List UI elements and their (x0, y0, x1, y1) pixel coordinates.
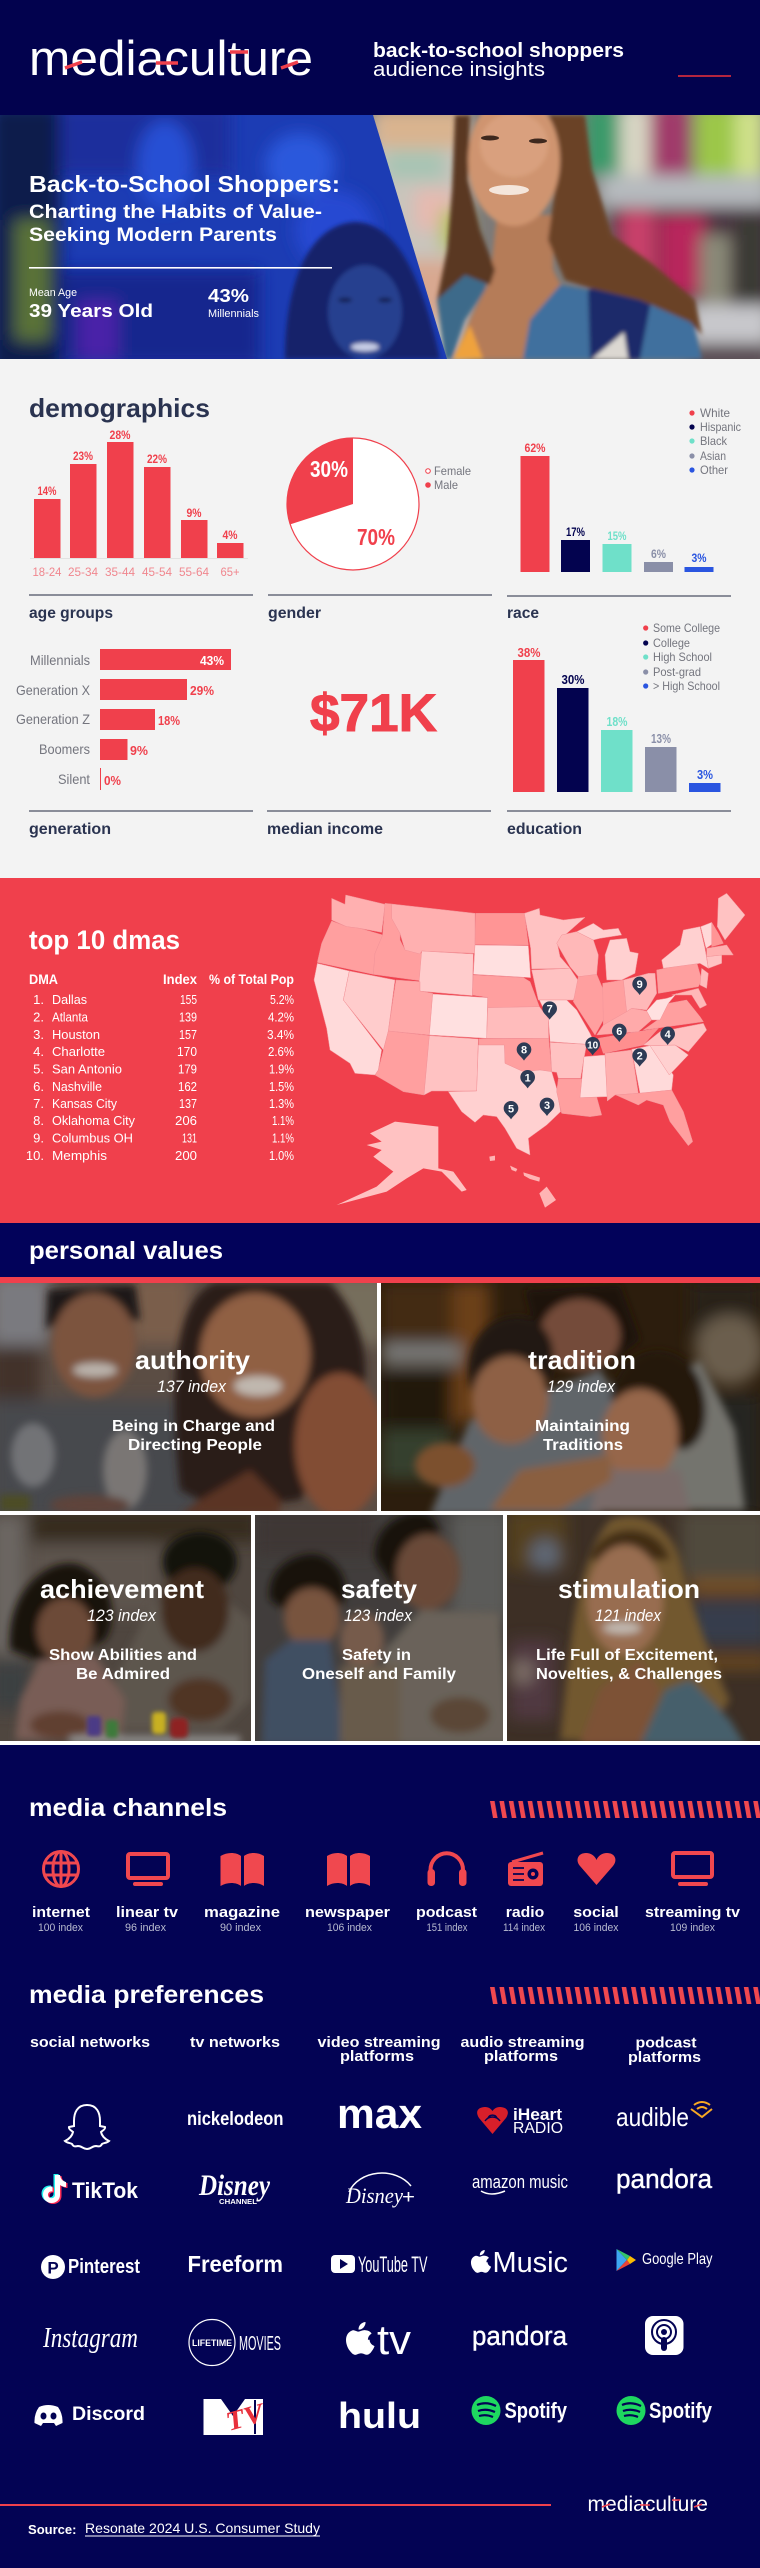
table: dma list: 9. (33, 1130, 44, 1146)
table: dma list: 206 (175, 1113, 197, 1128)
card: authority: Directing People (128, 1437, 262, 1454)
logo: instagram: Instagram (42, 2323, 138, 2354)
logo: disney plus: Disney (345, 2183, 403, 2208)
logo: tiktok (42, 2174, 139, 2204)
table: dma list: Kansas City (52, 1096, 117, 1111)
table: dma list: % of Total Pop (209, 971, 294, 987)
icon: open book (220, 1853, 264, 1886)
icon: tv (673, 1853, 712, 1886)
channel: streaming tv: streaming tv (645, 1904, 741, 1921)
logo: apple music: Music (492, 2247, 568, 2279)
logo: youtube tv (331, 2252, 428, 2277)
legend: race: White (700, 406, 730, 420)
channel: radio (503, 1853, 545, 1934)
chart: race: 6% (651, 547, 666, 561)
chart: age groups: 35-44 (105, 565, 135, 579)
logo: mtv (204, 2397, 269, 2437)
logo: discord: Discord (72, 2404, 145, 2425)
icon: tv (128, 1854, 168, 1886)
channel: linear tv: 96 index (125, 1922, 166, 1934)
channel: magazine: magazine (204, 1904, 280, 1921)
logo: apple tv: tv (377, 2316, 411, 2363)
hair (437, 115, 495, 300)
pin 1 Dallas (520, 1070, 535, 1088)
chart: generation: 0% (104, 773, 121, 788)
column headings: podcast (636, 2034, 696, 2052)
table: dma list (26, 971, 294, 1163)
channel: radio: radio (506, 1904, 544, 1921)
chart: age groups: 23% (73, 449, 93, 463)
logo: disney plus: + (402, 2187, 415, 2208)
card: safety: safety (341, 1574, 418, 1604)
logo: mediaculture: mediaculture (29, 32, 313, 86)
label: generation: generation (29, 821, 111, 838)
channel: podcast: 151 index (426, 1922, 468, 1934)
logo: lifetime movies: LIFETIME (192, 2338, 232, 2348)
heading: demographics: demographics (29, 393, 210, 423)
icon: heart (578, 1853, 615, 1885)
card: safety: Safety in (342, 1647, 411, 1664)
hero stat: mean age (29, 287, 153, 321)
pin 3 Houston (540, 1098, 554, 1116)
table: dma list: 131 (182, 1130, 197, 1146)
card: achievement: Be Admired (76, 1666, 170, 1683)
column headings: audio streaming (460, 2034, 584, 2051)
card: safety: 123 index (344, 1606, 412, 1625)
table: dma list: 3. (33, 1027, 44, 1042)
logo: hulu: hulu (338, 2395, 421, 2436)
channel: linear tv (116, 1854, 179, 1934)
map: united states (314, 893, 745, 1208)
table: dma list: 1.9% (269, 1062, 294, 1076)
logo: disney channel: CHANNEL (219, 2199, 258, 2206)
card: stimulation: Novelties, & Challenges (536, 1666, 722, 1683)
channel: magazine: 90 index (220, 1922, 261, 1934)
table: dma list: Columbus OH (52, 1130, 133, 1146)
face details (481, 136, 547, 195)
chart: education: 30% (562, 672, 585, 687)
column headings: platforms (340, 2048, 414, 2065)
logo: lifetime movies: MOVIES (239, 2333, 281, 2355)
hero photo: woman in store (373, 115, 760, 359)
chart: age groups (30, 428, 248, 579)
hero title: Back-to-School Shoppers: (29, 171, 340, 197)
channel: newspaper: newspaper (305, 1904, 390, 1921)
chart: gender pie (287, 438, 471, 570)
chart: age groups: 25-34 (68, 565, 98, 579)
heading: personal values: personal values (29, 1237, 223, 1265)
card: stimulation (507, 1510, 760, 1745)
card: stimulation: Life Full of Excitement, (536, 1647, 718, 1664)
table: dma list: Index (163, 971, 197, 987)
table: dma list: 157 (179, 1027, 197, 1042)
hero title (29, 171, 340, 246)
logo: disney channel: Disney (198, 2169, 271, 2202)
face (468, 94, 560, 226)
header title (373, 40, 624, 81)
chart: gender pie: 30% (310, 456, 348, 482)
hero stat: millennials: 43% (208, 286, 249, 306)
logo: iheart radio: iHeart (513, 2105, 562, 2124)
header band (0, 0, 760, 115)
chart: generation (16, 649, 231, 790)
panel: media channels (29, 1794, 760, 1934)
chart: race: 3% (692, 551, 707, 565)
legend: race (689, 406, 741, 477)
table: dma list: 3.4% (267, 1027, 294, 1042)
heading: media preferences: media preferences (29, 1981, 264, 2009)
card: tradition: Traditions (543, 1437, 623, 1454)
pin 6 Nashville (612, 1024, 627, 1042)
logo: spotify (472, 2396, 568, 2425)
table: dma list: Dallas (52, 992, 87, 1007)
table: dma list: Charlotte (52, 1044, 105, 1059)
pin 9 Columbus (632, 977, 647, 995)
card: authority (0, 1283, 377, 1511)
header title: back-to-school shoppers (373, 40, 624, 62)
logo: amazon music: amazon music (472, 2172, 568, 2192)
chart: race: 15% (608, 529, 627, 543)
panel: top 10 dmas (0, 878, 760, 1223)
chart: age groups: 45-54 (142, 565, 172, 579)
pin 8 Oklahoma City (517, 1042, 531, 1061)
legend: education: High School (653, 650, 712, 664)
legend: gender: Female (434, 464, 471, 478)
chart: age groups: 14% (38, 484, 57, 498)
pin 4 Charlotte (660, 1027, 675, 1045)
legend: race: Asian (700, 449, 726, 463)
label: median income: median income (267, 821, 383, 838)
logo: youtube tv: YouTube TV (358, 2252, 428, 2277)
icon: headphones (428, 1853, 466, 1886)
column headings: tv networks (190, 2034, 280, 2051)
column headings: video streaming (318, 2034, 440, 2051)
hero title: Charting the Habits of Value- (29, 202, 322, 223)
logo: tiktok: TikTok (72, 2178, 139, 2203)
pin 5 San Antonio (504, 1101, 518, 1119)
chart: age groups: 4% (222, 528, 238, 542)
table: dma list: 1.5% (269, 1079, 294, 1094)
card: tradition: 129 index (547, 1377, 615, 1396)
pin 8 Oklahoma City: 8 (521, 1045, 527, 1057)
logo: google play: Google Play (642, 2251, 712, 2268)
table: dma list: 137 (179, 1096, 197, 1111)
channel: podcast (416, 1853, 477, 1934)
pin 4 Charlotte: 4 (665, 1029, 672, 1041)
chart: generation: Boomers (39, 741, 90, 757)
footer (0, 2493, 708, 2537)
hero title: Seeking Modern Parents (29, 225, 277, 246)
chart: education: 13% (651, 731, 671, 746)
logo: apple tv (346, 2316, 411, 2363)
table: dma list: 170 (177, 1044, 197, 1059)
logo: pandora: pandora (616, 2164, 713, 2194)
card: authority: Being in Charge and (112, 1418, 275, 1435)
channel: social: 106 index (574, 1922, 619, 1934)
channel: podcast: podcast (416, 1904, 477, 1921)
jacket (437, 262, 490, 359)
table: dma list: Houston (52, 1027, 100, 1042)
chart: race: 62% (524, 441, 546, 455)
table: dma list: 1.3% (269, 1096, 294, 1111)
chart: generation: Millennials (30, 652, 90, 668)
logo: iheart radio: RADIO (513, 2120, 563, 2137)
pin 9 Columbus: 9 (637, 979, 643, 991)
chart: age groups: 9% (186, 506, 202, 520)
pin 10 Memphis: 10 (587, 1040, 599, 1051)
legend: gender (425, 464, 471, 492)
logo: spotify: Spotify (649, 2398, 713, 2423)
logo: google play (616, 2249, 712, 2271)
logo: spotify (616, 2396, 713, 2425)
channel: internet: internet (32, 1904, 90, 1921)
table: dma list: 5. (33, 1062, 44, 1076)
chart: age groups: 18-24 (32, 565, 62, 579)
legend: gender: Male (434, 478, 458, 492)
label: age groups: age groups (29, 605, 113, 622)
hero photo: blue tinted girl (0, 115, 447, 359)
card: stimulation: stimulation (558, 1574, 700, 1604)
chart: race: 17% (566, 525, 585, 539)
channel: social (573, 1853, 619, 1934)
hero stat: mean age: Mean Age (29, 287, 77, 299)
table: dma list: 1. (33, 992, 44, 1007)
table: dma list: Oklahoma City (52, 1113, 135, 1128)
logo: iheart radio (477, 2105, 563, 2137)
logo: discord (34, 2404, 145, 2426)
channel: magazine (204, 1853, 280, 1934)
icon: open book (327, 1853, 370, 1886)
label: gender: gender (268, 605, 321, 622)
icon: radio (508, 1853, 543, 1886)
legend: education: College (653, 636, 690, 650)
table: dma list: 1.1% (272, 1130, 294, 1146)
pin 2 Atlanta (632, 1048, 647, 1067)
card: safety (255, 1510, 510, 1745)
chart: education (513, 645, 720, 792)
logo: pinterest (41, 2255, 140, 2279)
card: authority: authority (135, 1345, 251, 1375)
chart: generation: 43% (200, 653, 224, 668)
table: dma list: Atlanta (52, 1010, 89, 1024)
channel: internet: 100 index (38, 1922, 83, 1934)
neck and chest (453, 215, 563, 359)
channel: newspaper (305, 1853, 390, 1934)
pin 5 San Antonio: 5 (508, 1103, 514, 1115)
pin 7 Kansas City (542, 1001, 557, 1020)
chart: age groups: 28% (110, 428, 131, 442)
header title: audience insights (373, 59, 545, 81)
card: tradition: tradition (528, 1345, 636, 1375)
chart: education: 38% (518, 645, 541, 660)
channel: streaming tv: 109 index (670, 1922, 715, 1934)
chart: age groups: 55-64 (179, 565, 209, 579)
legend: education (643, 621, 720, 693)
card: authority: 137 index (157, 1377, 226, 1396)
table: dma list: 1.1% (272, 1113, 294, 1128)
chart: age groups: 22% (147, 452, 167, 466)
label: education: education (507, 821, 582, 838)
chart: race (520, 441, 714, 572)
logo: freeform: Freeform (188, 2251, 283, 2277)
chart: generation: Generation X (16, 682, 91, 698)
label: race: race (507, 605, 539, 622)
logo: pinterest: Pinterest (68, 2256, 140, 2278)
map pins (504, 977, 675, 1119)
logo: nickelodeon: nickelodeon (187, 2109, 284, 2130)
card: tradition (381, 1283, 760, 1515)
card: achievement (0, 1510, 260, 1744)
card: safety: Oneself and Family (302, 1666, 456, 1683)
logo: lifetime movies (189, 2320, 281, 2366)
hero stat: mean age: 39 Years Old (29, 301, 153, 321)
footer logo: mediaculture (588, 2493, 708, 2516)
chart: age groups: 65+ (220, 565, 240, 579)
column headings (30, 2034, 701, 2066)
pin 6 Nashville: 6 (616, 1026, 622, 1038)
table: dma list: 8. (33, 1113, 44, 1128)
column headings: social networks (30, 2034, 150, 2051)
chart: gender pie: 70% (357, 524, 395, 550)
table: dma list: Memphis (52, 1148, 108, 1163)
chart: generation: Generation Z (16, 711, 90, 727)
channel: linear tv: linear tv (116, 1904, 179, 1921)
table: dma list: 200 (175, 1148, 197, 1163)
channel: social: social (573, 1904, 619, 1921)
logo: pinterest: P (47, 2258, 59, 2278)
channel: internet (32, 1851, 90, 1934)
logo: audible: audible (616, 2102, 689, 2132)
table: dma list: 4. (33, 1044, 44, 1059)
table: dma list: 162 (178, 1079, 197, 1094)
column headings: platforms (484, 2048, 558, 2065)
hero stat: millennials: Millennials (208, 308, 259, 320)
legend: race: Other (700, 463, 728, 477)
table: dma list: 6. (33, 1079, 44, 1094)
icon: globe (44, 1851, 78, 1887)
table: dma list: 4.2% (268, 1010, 294, 1024)
table: dma list: DMA (29, 971, 58, 987)
legend: education: Post-grad (653, 665, 701, 679)
heading: top 10 dmas: top 10 dmas (29, 925, 180, 955)
table: dma list: 155 (180, 992, 197, 1007)
chart: education: 3% (697, 767, 713, 782)
chart: generation: 29% (190, 683, 214, 698)
card: stimulation: 121 index (595, 1606, 661, 1625)
table: dma list: 7. (33, 1096, 44, 1111)
table: dma list: 2. (33, 1010, 44, 1024)
hero stat: millennials (208, 286, 259, 320)
pin 7 Kansas City: 7 (547, 1004, 553, 1016)
chart: generation: 9% (130, 743, 148, 758)
logo: pandora: pandora (472, 2321, 568, 2351)
chart: generation: 18% (158, 713, 180, 728)
legend: education: Some College (653, 621, 720, 635)
legend: education: > High School (653, 679, 720, 693)
table: dma list: 179 (178, 1062, 197, 1076)
heading: media channels: media channels (29, 1794, 227, 1822)
chart: generation: Silent (58, 771, 90, 787)
table: dma list: Nashville (52, 1079, 102, 1094)
source line: Resonate 2024 U.S. Consumer Study (85, 2520, 320, 2536)
chart: education: 18% (606, 714, 628, 729)
panel: personal values photos (0, 1275, 760, 1745)
hero banner (0, 115, 760, 359)
table: dma list: 5.2% (270, 992, 294, 1007)
column headings: platforms (628, 2049, 701, 2066)
logo: disney plus (345, 2173, 415, 2208)
pin 3 Houston: 3 (544, 1100, 550, 1112)
channel: newspaper: 106 index (327, 1922, 372, 1934)
channel: streaming tv (645, 1853, 741, 1934)
table: dma list: 10. (26, 1148, 44, 1163)
logo: spotify: Spotify (504, 2398, 568, 2423)
header accent line (678, 75, 731, 77)
table: dma list: 139 (179, 1010, 197, 1024)
logo: apple podcasts (645, 2316, 684, 2355)
card: achievement: Show Abilities and (49, 1647, 197, 1664)
band: personal values (0, 1223, 760, 1277)
source line: Source: (28, 2522, 76, 2537)
table: dma list: San Antonio (52, 1062, 122, 1076)
pin 10 Memphis (585, 1037, 600, 1055)
logo: snapchat (65, 2105, 109, 2149)
table: dma list: 2.6% (268, 1044, 294, 1059)
logo: max: max (337, 2090, 423, 2137)
panel: demographics (0, 359, 760, 878)
table: dma list: 1.0% (269, 1148, 294, 1163)
channel: radio: 114 index (503, 1922, 545, 1934)
legend: race: Hispanic (700, 420, 741, 434)
card: tradition: Maintaining (535, 1418, 630, 1435)
legend: race: Black (700, 434, 728, 448)
pin 1 Dallas: 1 (525, 1072, 531, 1084)
card: achievement: achievement (40, 1574, 204, 1604)
pin 2 Atlanta: 2 (637, 1051, 643, 1063)
panel: media preferences (29, 1981, 760, 2437)
card: achievement: 123 index (87, 1606, 156, 1625)
logo: mtv: TV (222, 2397, 269, 2437)
stat: median income: $71K (310, 684, 437, 743)
